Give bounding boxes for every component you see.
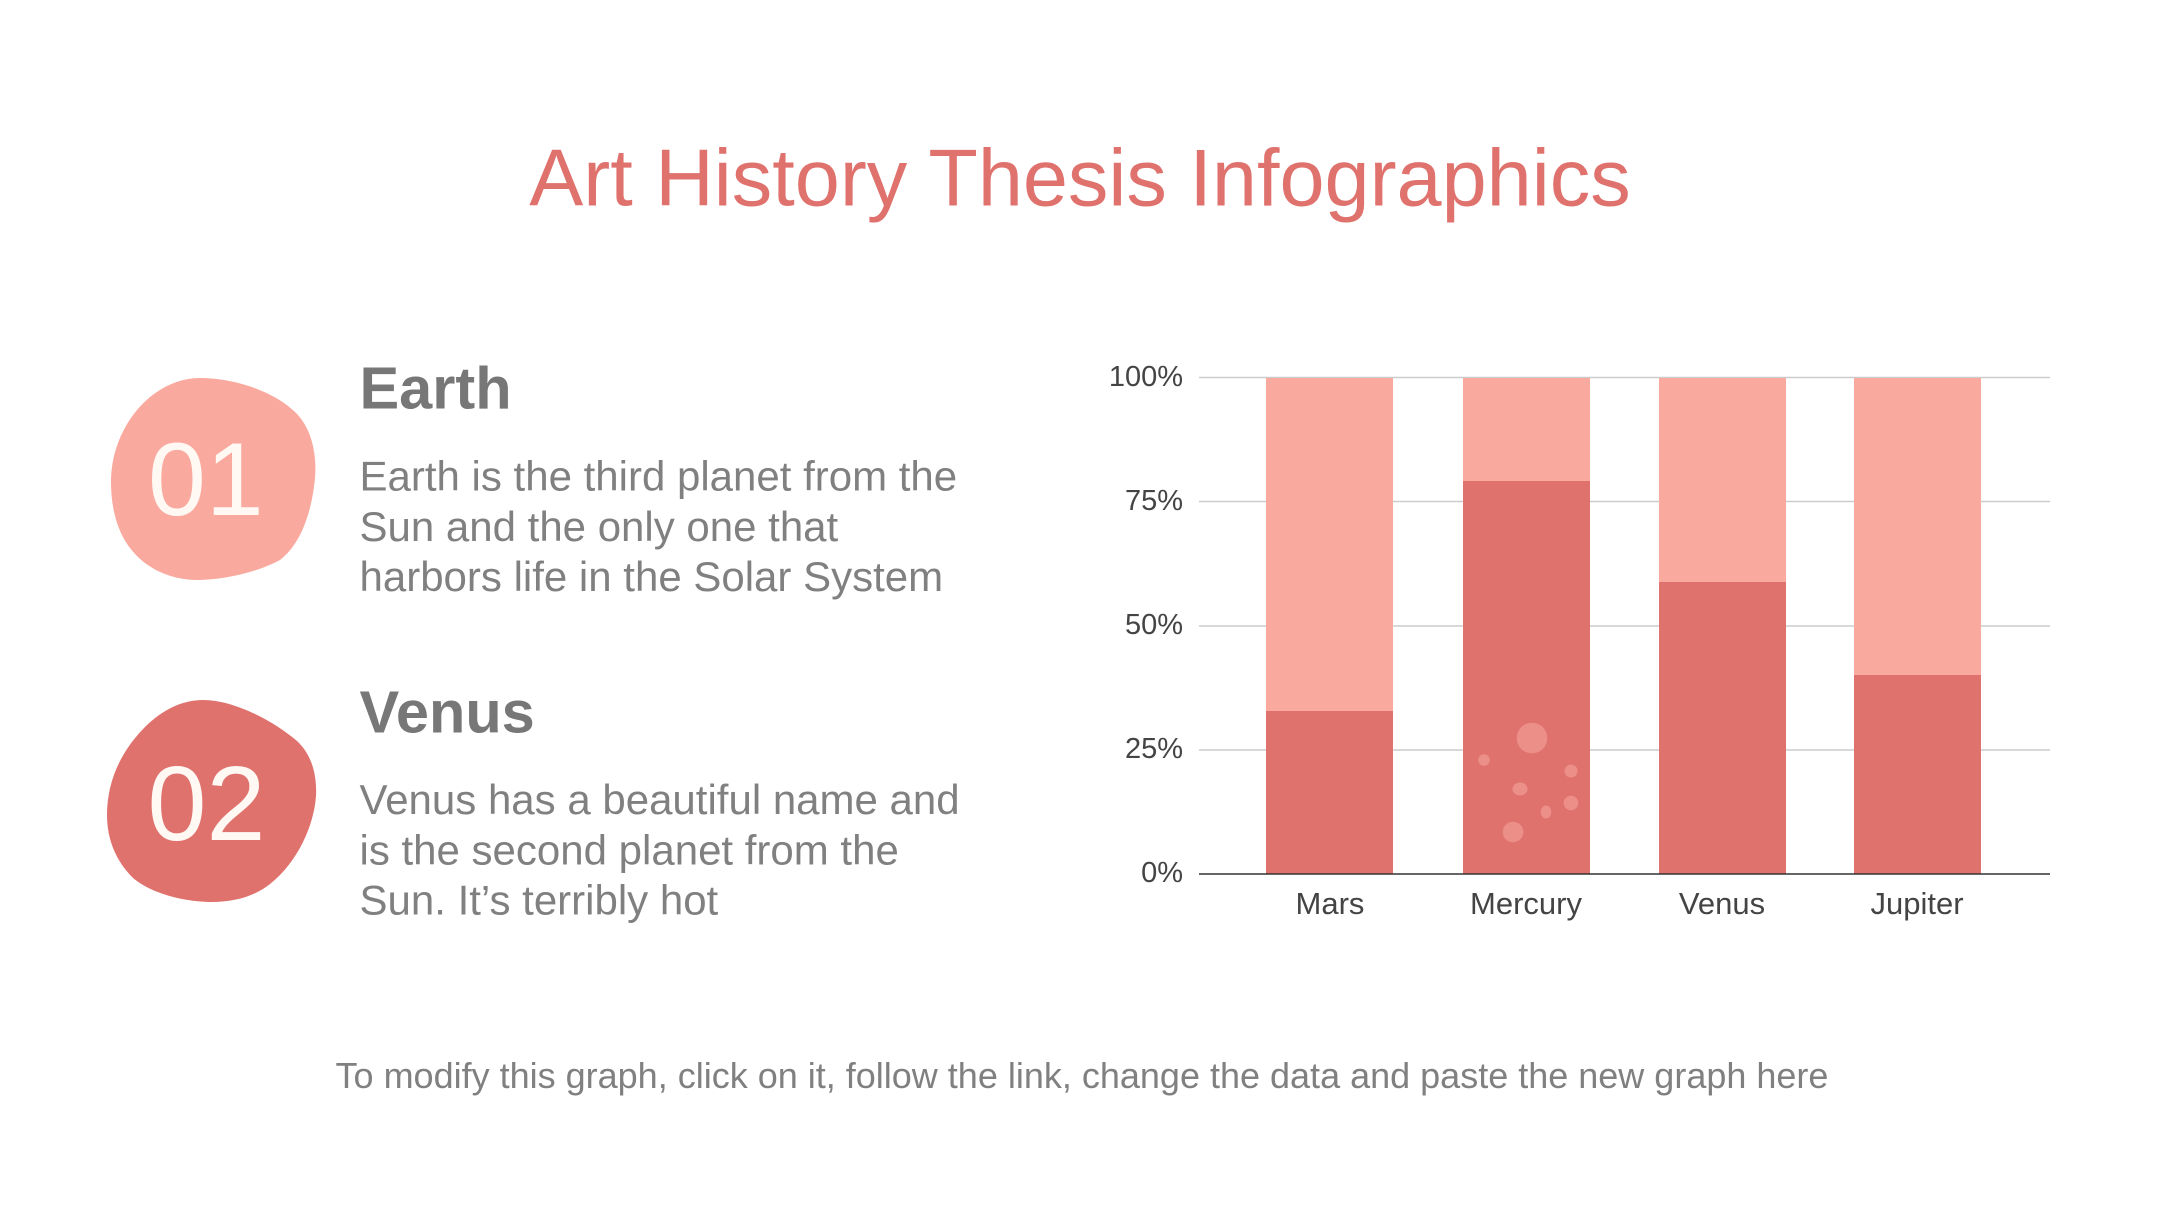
- y axis labels: [1109, 361, 1183, 889]
- bar: Jupiter: [1854, 378, 1981, 874]
- bar: Mercury: [1463, 378, 1590, 874]
- y axis labels: 75%: [1125, 485, 1183, 517]
- x axis labels: Mercury: [1470, 886, 1582, 921]
- icon: blob 01: 01: [148, 422, 264, 538]
- heading: Earth: Earth: [360, 354, 512, 422]
- icon: blob 01: [111, 378, 315, 580]
- icon: blob 02: 02: [148, 745, 265, 863]
- text block: Venus description: Sun. It’s terribly hot: [360, 876, 719, 924]
- title: Art History Thesis Infographics: [529, 134, 1631, 224]
- bar: Mars: [1266, 378, 1393, 874]
- panel: item 01 Earth: [111, 354, 957, 600]
- decorative dots: [1478, 723, 1578, 842]
- y axis labels: 0%: [1141, 857, 1183, 889]
- text block: Earth description: Sun and the only one that: [360, 503, 839, 550]
- text block: Earth description: harbors life in the Solar System: [360, 553, 943, 600]
- y axis labels: 100%: [1109, 361, 1183, 393]
- bar chart: [1109, 361, 2050, 921]
- text block: Earth description: Earth is the third planet from the: [360, 452, 957, 500]
- panel: item 02 Venus: [107, 678, 960, 924]
- x axis labels: Venus: [1679, 886, 1765, 921]
- x axis labels: Jupiter: [1870, 886, 1964, 921]
- y axis labels: 50%: [1125, 609, 1183, 641]
- icon: blob 02: [107, 700, 316, 902]
- x axis labels: [1296, 886, 1964, 921]
- heading: Venus: Venus: [360, 678, 535, 746]
- x axis labels: Mars: [1296, 886, 1364, 921]
- text block: Venus description: Venus has a beautiful name and: [360, 776, 960, 823]
- bar: Venus: [1659, 378, 1786, 874]
- text block: Venus description: is the second planet from the: [360, 826, 899, 874]
- footer note: To modify this graph, click on it, follow the link, change the data and paste the new graph here: [336, 1055, 1828, 1096]
- y axis labels: 25%: [1125, 733, 1183, 765]
